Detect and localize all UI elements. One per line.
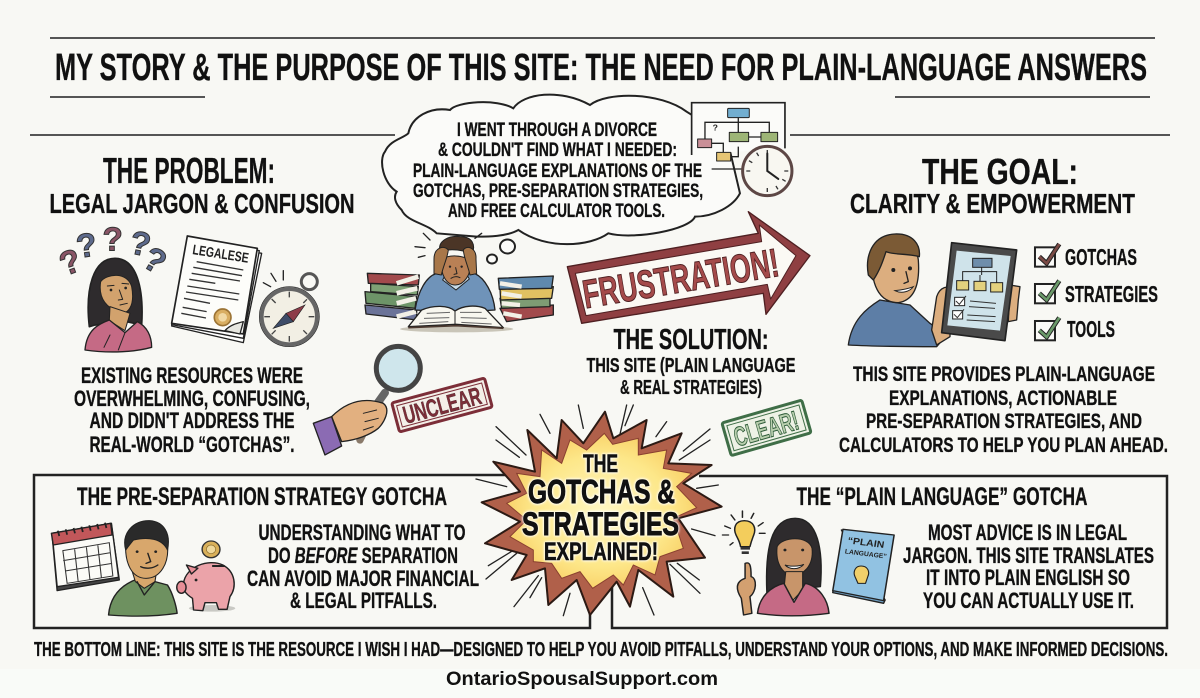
burst graphic — [476, 405, 722, 616]
burst inner — [507, 433, 697, 588]
burst title: GOTCHAS & — [528, 473, 675, 510]
icon: confused woman with question marks: ? — [126, 224, 154, 265]
burst title: EXPLAINED! — [544, 538, 658, 566]
arrow: frustration — [567, 212, 810, 323]
icon: plain language book — [833, 529, 894, 603]
heading: THE PRE-SEPARATION STRATEGY GOTCHA — [77, 483, 447, 511]
text: divorce story: & COULDN'T FIND WHAT I NEEDED: — [438, 140, 677, 161]
icon: flowchart — [692, 103, 785, 161]
icon: confused woman with question marks: ? — [136, 240, 172, 282]
burst title — [522, 450, 679, 566]
text: understanding: UNDERSTANDING WHAT TO — [258, 520, 466, 545]
burst title: THE — [583, 450, 618, 478]
icon: plain language book: LANGUAGE” — [844, 548, 888, 560]
thought bubble — [382, 95, 792, 264]
stamp: clear: CLEAR! — [730, 405, 802, 452]
text: existing resources: REAL-WORLD “GOTCHAS”. — [90, 432, 294, 457]
panel border — [34, 475, 590, 628]
panel: the problem — [50, 150, 492, 457]
check item: tools: TOOLS — [1067, 316, 1115, 342]
heading: the goal — [850, 151, 1135, 219]
text: site provides: EXPLANATIONS, ACTIONABLE — [889, 387, 1117, 410]
website url: OntarioSpousalSupport.com — [446, 669, 718, 690]
icon: broken compass — [259, 271, 319, 347]
text: understanding: CAN AVOID MAJOR FINANCIAL — [247, 566, 479, 591]
checklist — [1035, 244, 1158, 342]
text: existing resources — [74, 363, 310, 457]
icon: man with tablet — [848, 234, 1020, 347]
panel: plain language gotcha — [612, 476, 1167, 628]
icon: plain language book: “PLAIN — [847, 536, 885, 551]
burst title: STRATEGIES — [522, 506, 679, 542]
heading: the goal: THE GOAL: — [922, 151, 1078, 192]
burst action lines — [476, 405, 718, 616]
heading: the problem: THE PROBLEM: — [103, 150, 275, 191]
panel: the goal — [839, 151, 1168, 457]
icon: confused woman with question marks: ? — [55, 242, 86, 284]
text: understanding: DO BEFORE SEPARATION — [268, 543, 458, 568]
stamp: unclear — [392, 378, 492, 432]
text: divorce story — [413, 120, 703, 222]
stamp: clear — [722, 400, 811, 456]
check item: gotchas: GOTCHAS — [1065, 244, 1137, 270]
icon: confused woman with question marks: ? — [102, 222, 123, 259]
icon: hand with magnifying glass — [313, 346, 420, 455]
text: existing resources: EXISTING RESOURCES WERE — [81, 363, 303, 388]
text: existing resources: AND DIDN'T ADDRESS THE — [90, 408, 294, 433]
icon: legalese document — [172, 236, 262, 343]
icon: flowchart: ? — [713, 123, 718, 133]
text: divorce story: AND FREE CALCULATOR TOOLS. — [448, 201, 665, 222]
icon: light bulb — [722, 511, 765, 553]
icon: legalese document: LEGALESE — [192, 241, 250, 266]
small thought circles — [487, 240, 515, 264]
icon: stressed person with books — [365, 233, 553, 332]
arrow outline — [567, 212, 810, 323]
icon: piggy bank and coin — [177, 541, 235, 612]
starburst: the gotchas and strategies explained — [476, 405, 722, 616]
text: divorce story: PLAIN-LANGUAGE EXPLANATIONS OF THE — [413, 161, 702, 182]
icon: woman pointing — [737, 518, 829, 616]
open book — [400, 306, 513, 332]
heading: the problem: LEGAL JARGON & CONFUSION — [50, 188, 354, 219]
cloud outline — [382, 95, 740, 244]
icon: confused woman with question marks — [55, 222, 172, 352]
arrow label: FRUSTRATION! — [580, 241, 782, 317]
icon: confused woman with question marks: ? — [74, 226, 99, 266]
burst shape — [482, 412, 722, 615]
text: understanding: & LEGAL PITFALLS. — [290, 588, 437, 613]
text: divorce story: I WENT THROUGH A DIVORCE — [457, 120, 657, 141]
text: divorce story: GOTCHAS, PRE-SEPARATION STRATEGIES, — [413, 181, 703, 202]
text: understanding — [247, 520, 479, 613]
stamp: unclear: UNCLEAR — [400, 382, 485, 430]
panel: the solution — [586, 324, 811, 456]
text: solution detail: & REAL STRATEGIES) — [620, 377, 762, 399]
heading: the problem — [50, 150, 354, 219]
icon: clock — [712, 146, 792, 196]
books left — [365, 273, 419, 320]
text: solution detail — [586, 355, 796, 399]
icon: calendar — [51, 523, 119, 591]
books right — [498, 276, 553, 322]
person — [400, 233, 513, 332]
text: existing resources: OVERWHELMING, CONFUSING, — [74, 386, 310, 411]
text: most advice — [903, 520, 1154, 613]
icon: man — [109, 521, 177, 616]
panel border — [612, 476, 1167, 628]
panel: pre-separation strategy gotcha — [34, 475, 590, 628]
book stacks — [365, 273, 553, 322]
text: solution detail: THIS SITE (PLAIN LANGUAGE — [586, 355, 796, 377]
heading: the solution: THE SOLUTION: — [614, 324, 768, 356]
text: site provides — [839, 363, 1168, 457]
